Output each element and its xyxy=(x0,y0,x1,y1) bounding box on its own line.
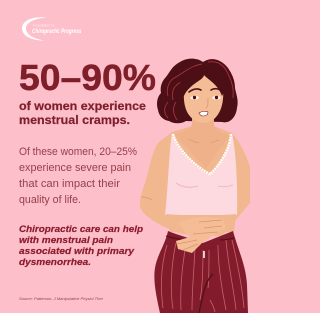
chiropractic callout: dysmenorrhea. xyxy=(19,257,91,268)
hair strands xyxy=(165,62,233,120)
trousers xyxy=(154,231,248,313)
illustration: woman with cramps xyxy=(140,59,250,313)
neck xyxy=(174,110,230,168)
waist skin xyxy=(166,214,236,232)
eyes xyxy=(190,96,221,100)
pinstripes xyxy=(161,240,244,312)
subheading xyxy=(19,101,146,127)
lace trim xyxy=(173,134,231,174)
hair back xyxy=(157,59,238,123)
camisole top xyxy=(165,133,237,215)
chiropractic callout: Chiropractic care can help xyxy=(19,224,143,235)
body text: quality of life. xyxy=(19,194,81,206)
body text xyxy=(19,146,137,206)
left arm and shoulders xyxy=(140,126,250,236)
chiropractic callout: with menstrual pain xyxy=(19,235,113,246)
waistband xyxy=(166,236,234,241)
bust folds xyxy=(176,183,233,187)
subheading: menstrual cramps. xyxy=(19,115,130,127)
chiropractic callout: associated with primary xyxy=(19,246,135,257)
hair fringe xyxy=(180,65,225,99)
logo: Foundation for xyxy=(33,24,56,28)
body text: experience severe pain xyxy=(19,162,131,174)
hands on belly xyxy=(176,217,226,253)
mouth xyxy=(199,111,208,116)
logo xyxy=(22,17,82,41)
source note: Source: Patterson, J Manipulative Physiol Ther xyxy=(19,297,104,301)
face xyxy=(184,75,223,123)
towel string xyxy=(203,251,205,258)
collarbones xyxy=(188,139,219,143)
chiropractic callout xyxy=(19,224,143,268)
logo: Chiropractic Progress xyxy=(32,29,82,35)
subheading: of women experience xyxy=(19,101,146,113)
body text: Of these women, 20–25% xyxy=(19,146,137,158)
trouser seam xyxy=(199,274,213,313)
body text: that can impact their xyxy=(19,178,120,190)
eyebrows xyxy=(189,89,222,92)
headline statistic: 50–90% xyxy=(19,57,156,98)
nose xyxy=(206,98,208,108)
